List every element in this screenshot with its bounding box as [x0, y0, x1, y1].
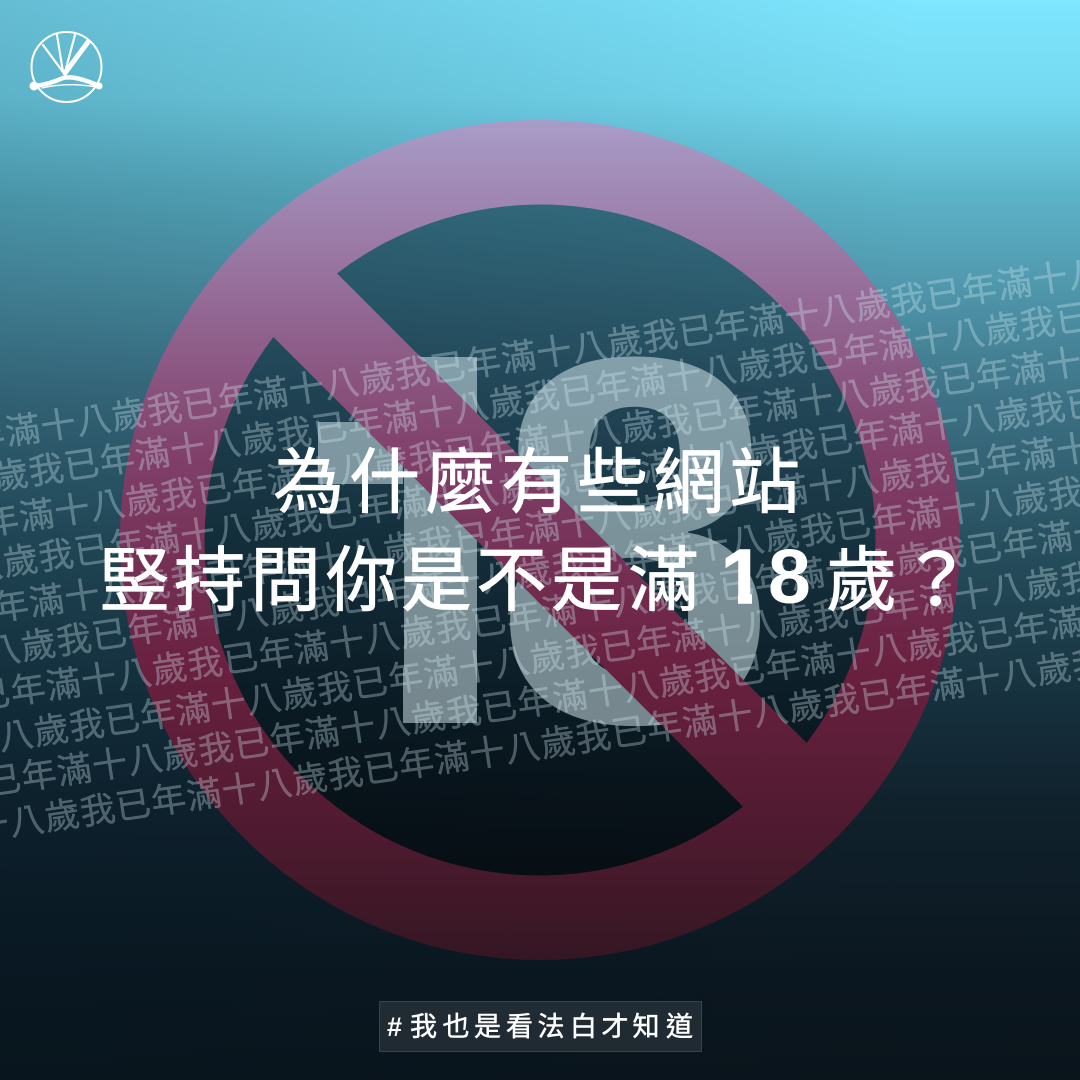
- title: 為什麼有些網站: [273, 444, 800, 523]
- title: 歲: [826, 542, 897, 621]
- title: 1: [721, 534, 764, 620]
- title: 竪持問你是不是滿: [99, 542, 699, 621]
- title: 8: [768, 534, 811, 620]
- title: [99, 444, 972, 621]
- large number 18: [318, 356, 760, 726]
- title: ？: [901, 542, 972, 621]
- hashtag tag: 我也是看法白才知道: [410, 1012, 693, 1042]
- inner disc shadow: [195, 195, 885, 885]
- large number 18: 8: [494, 248, 776, 832]
- hashtag tag: #: [387, 1012, 402, 1042]
- hashtag tag: [380, 1002, 702, 1052]
- logo: [30, 32, 102, 102]
- repeated slanted text: [0, 231, 1080, 854]
- large number 18: 1: [278, 235, 578, 838]
- prohibition sign: [120, 120, 960, 960]
